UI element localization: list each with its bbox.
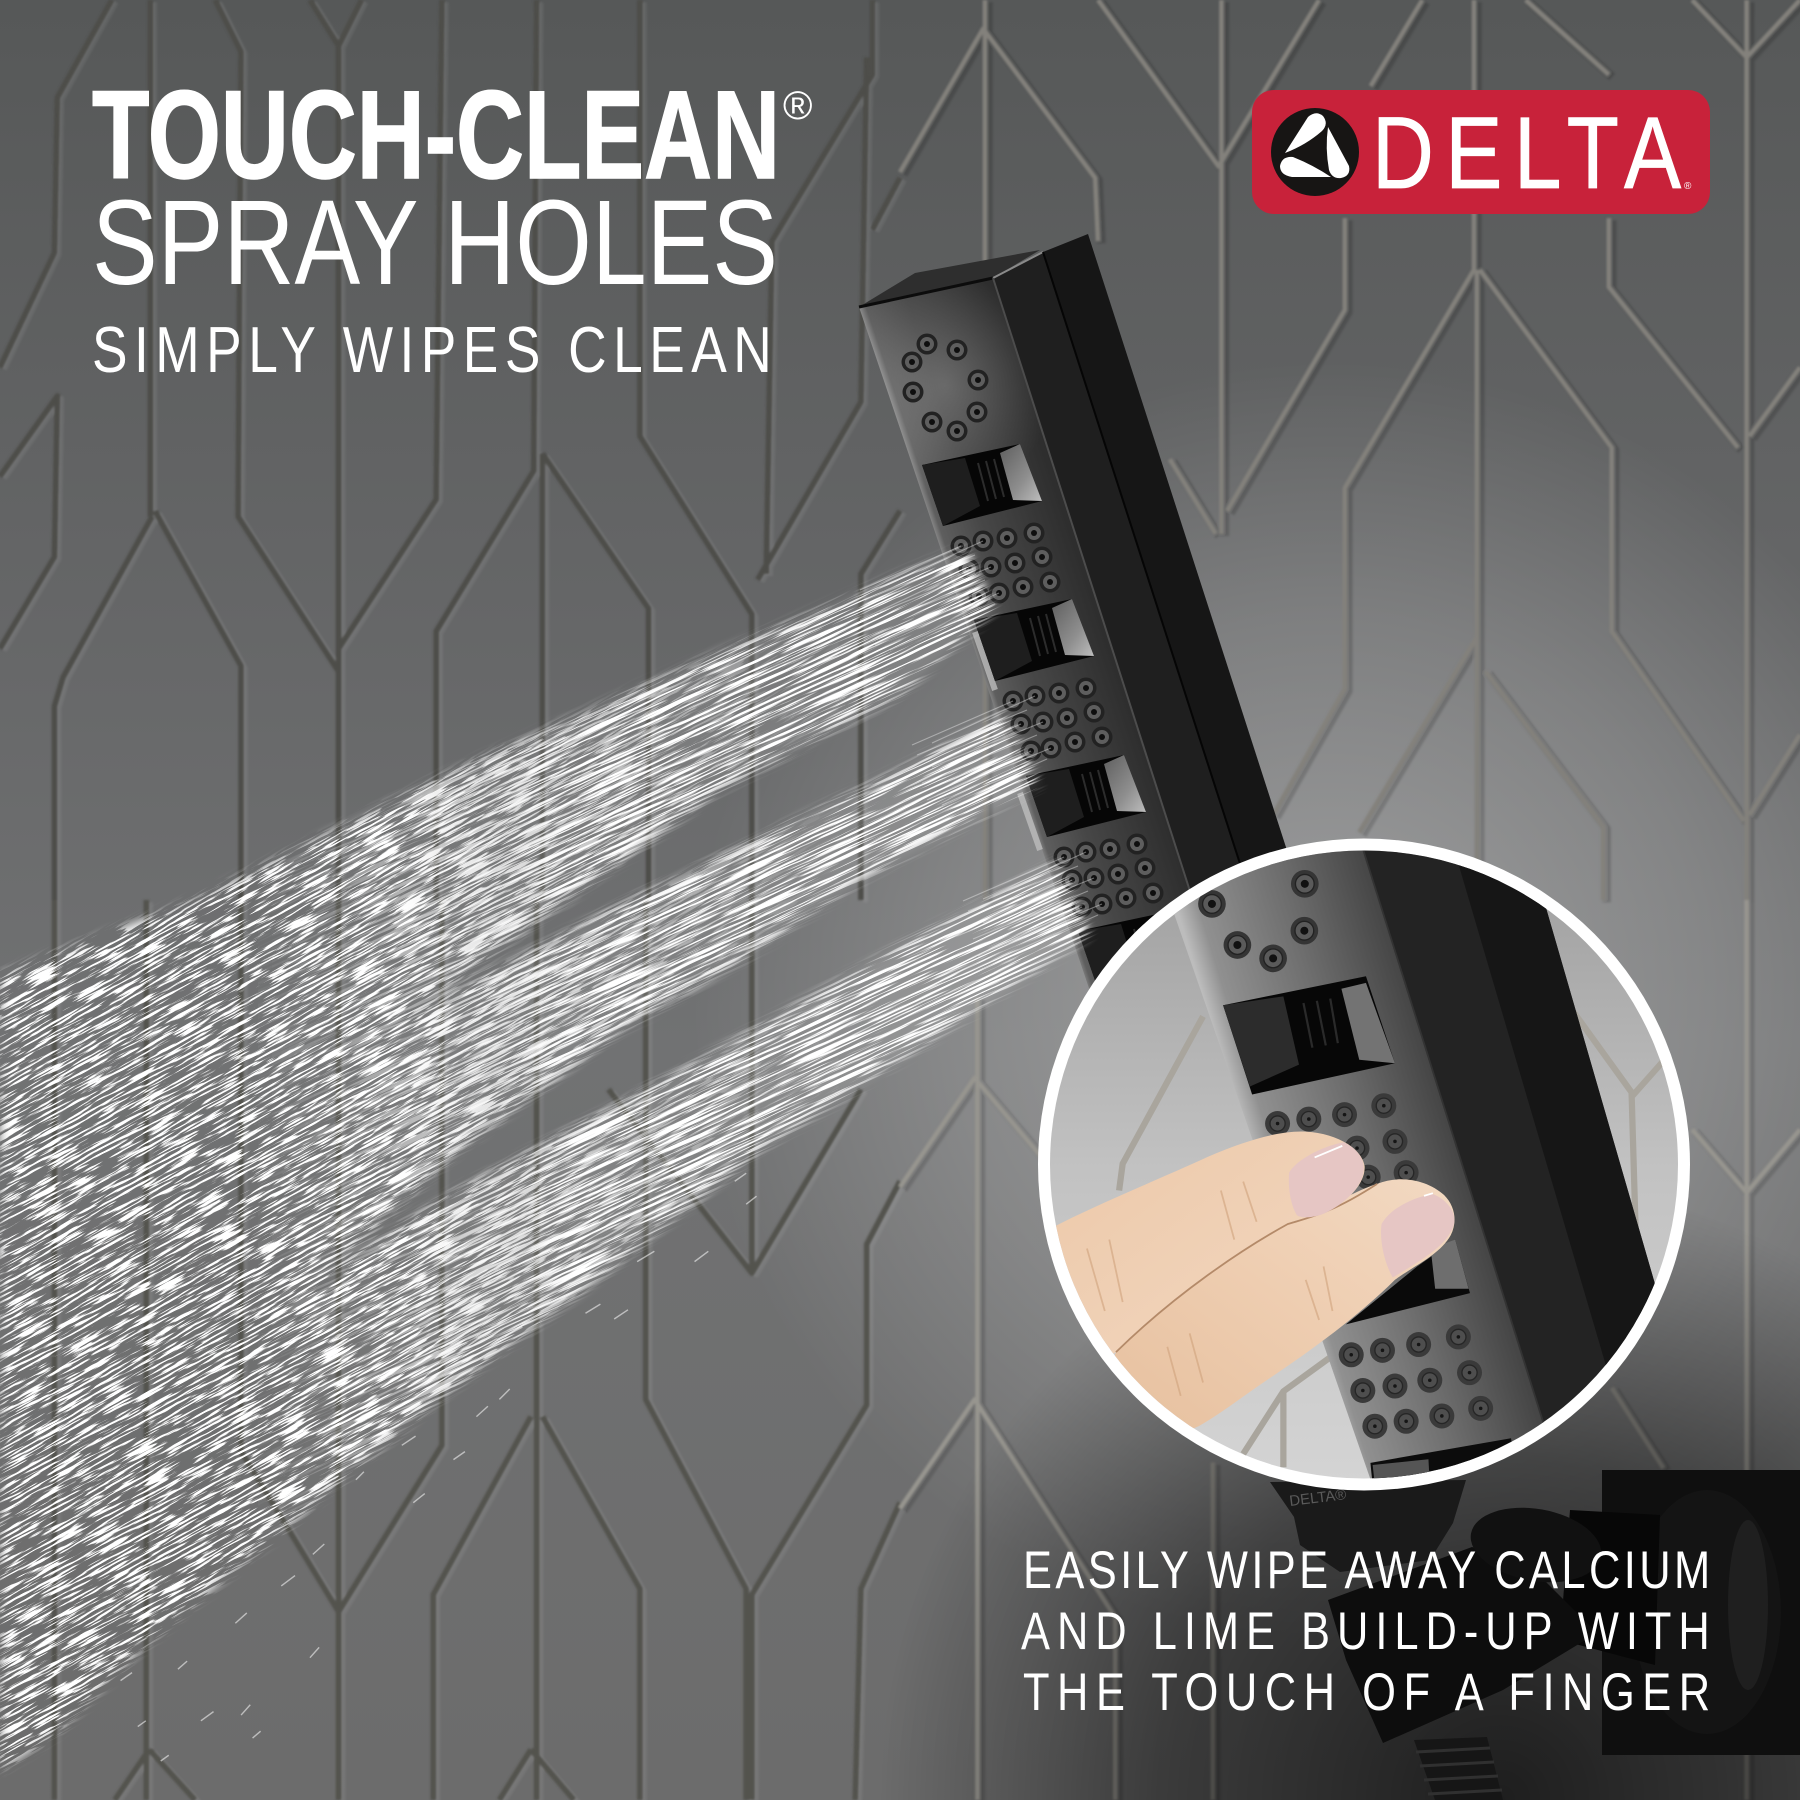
bottom caption: AND LIME BUILD-UP WITH [1021,1602,1710,1661]
logo mark [1271,108,1359,196]
title: SPRAY HOLES: SPRAY HOLES [92,174,778,310]
registered mark: ® [1684,181,1692,192]
stray droplets [121,1173,757,1761]
water spray streams [0,540,1102,1774]
bottom caption: EASILY WIPE AWAY CALCIUM [1023,1541,1710,1600]
magnified wand face [1174,850,1544,1478]
spray holes: top ring [902,334,988,442]
magnified detail circle [1038,838,1690,1490]
fine jets leaving the nozzles [860,541,1102,961]
DELTA wordmark: DELTA [1372,96,1681,210]
bottom caption [1021,1541,1710,1722]
Delta logo badge [1252,90,1710,214]
hand shower wand [859,234,1345,1080]
registered mark: ® [783,84,812,128]
magnified sliders [1223,976,1518,1485]
magnified wand side [1364,850,1655,1424]
sliders and spray hole grids [922,444,1198,992]
magnified spray holes [1198,870,1493,1439]
bottom caption: THE TOUCH OF A FINGER [1023,1663,1710,1722]
fingers [1038,1131,1455,1445]
wall mount bracket and hose: DELTA® [1288,1486,1347,1510]
subtitle: SIMPLY WIPES CLEAN [92,313,772,386]
title: TOUCH-CLEAN: TOUCH-CLEAN [92,66,780,205]
tile joints inside circle [1116,1010,1662,1468]
wall mount bracket and hose [1270,1470,1800,1800]
fingernails [1289,1142,1364,1217]
